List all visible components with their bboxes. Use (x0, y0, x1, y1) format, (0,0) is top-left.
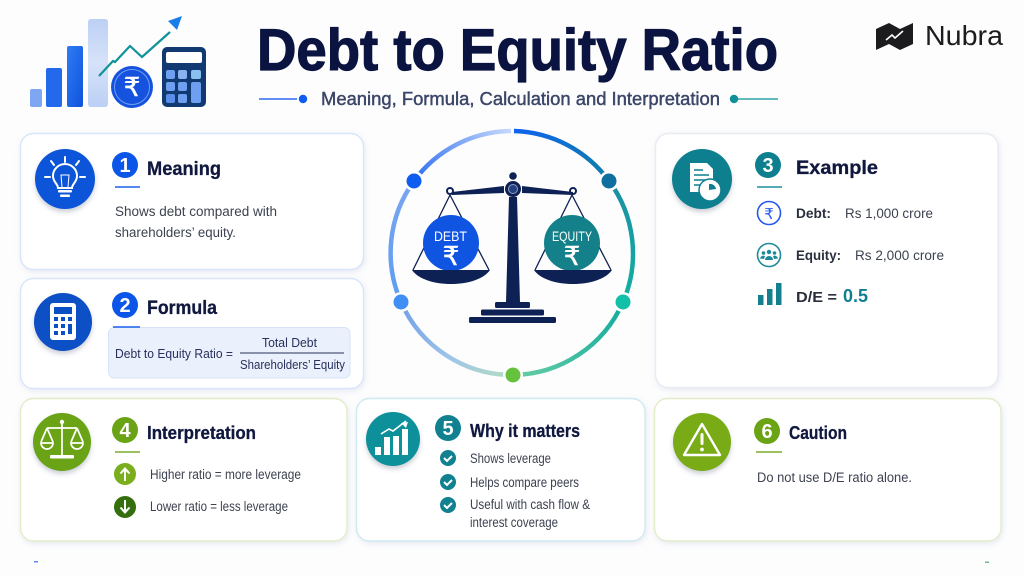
icon: document with pie (672, 149, 732, 209)
left pan: debt: ₹ (443, 241, 459, 271)
left pan: debt (412, 195, 490, 284)
number badge 6: 6 (761, 421, 773, 443)
number badge 6 (754, 418, 782, 452)
left pan: debt: DEBT (434, 229, 467, 244)
heading: formula: Formula (147, 297, 217, 319)
number badge 5 (435, 415, 461, 441)
icon: growth chart (366, 412, 420, 466)
number badge 2 (112, 292, 138, 318)
icon: calculator (162, 47, 206, 107)
formula box (108, 327, 350, 378)
heading: interpretation: Interpretation (147, 423, 256, 443)
panel: caution (654, 398, 1001, 541)
panel: meaning (20, 134, 364, 270)
heading: example: Example (796, 157, 878, 179)
number badge 3: 3 (762, 155, 774, 177)
number badge 1: 1 (119, 155, 131, 177)
row: higher ratio (114, 463, 301, 485)
icon: finance bars, rupee coin and calculator (30, 16, 206, 108)
list item: useful with cash flow: Useful with cash flow & (470, 497, 590, 512)
icon: balance scale (33, 413, 91, 471)
row: equity: Equity: (796, 248, 841, 263)
right pan: equity (534, 195, 612, 284)
heading: why it matters: Why it matters (470, 421, 580, 441)
icon: rising trend arrow (99, 16, 182, 76)
number badge 4: 4 (119, 420, 131, 442)
icon: warning triangle (673, 413, 731, 471)
text: meaning description: shareholders’ equity. (115, 225, 236, 240)
text: caution description: Do not use D/E ratio alone. (757, 470, 912, 485)
row: D/E result: D/E = (796, 290, 837, 306)
icon: light bulb (35, 149, 95, 209)
list item: shows leverage (440, 450, 551, 466)
ring nodes (391, 171, 633, 385)
panel: interpretation (20, 398, 347, 541)
heading: caution: Caution (789, 423, 847, 443)
list item: useful with cash flow (440, 497, 590, 530)
logo: Nubra (876, 20, 1003, 51)
row: lower ratio: Lower ratio = less leverage (150, 499, 288, 514)
row: debt: ₹ (764, 206, 774, 223)
formula box: Total Debt (262, 336, 318, 350)
row: debt: Rs 1,000 crore (845, 206, 933, 221)
row: D/E result (758, 283, 868, 306)
scale stand (447, 172, 576, 323)
row: D/E result: 0.5 (843, 285, 868, 306)
row: debt: Debt: (796, 206, 831, 221)
panel: example (656, 134, 998, 388)
balance scale (412, 172, 612, 323)
icon: rupee coin (111, 66, 153, 108)
list item: helps compare peers (440, 474, 579, 490)
formula box: Debt to Equity Ratio = (115, 347, 233, 361)
row: debt (758, 202, 933, 224)
panel: formula (20, 278, 364, 388)
right pan: equity: ₹ (564, 241, 580, 271)
number badge 4 (112, 417, 140, 452)
icon: rupee coin: ₹ (124, 72, 140, 102)
subtitle with connector dots: Meaning, Formula, Calculation and Interpretation (321, 88, 720, 109)
list item: useful with cash flow: interest coverage (470, 515, 558, 530)
right pan: equity: EQUITY (552, 229, 592, 244)
title: Debt to Equity Ratio (257, 18, 778, 83)
central ring (391, 131, 633, 385)
number badge 3 (755, 152, 782, 187)
row: higher ratio: Higher ratio = more leverage (150, 467, 301, 482)
panel: why it matters (356, 398, 645, 541)
icon: bar chart (30, 19, 108, 107)
number badge 2: 2 (119, 295, 131, 317)
text: meaning description (115, 204, 277, 240)
list item: shows leverage: Shows leverage (470, 451, 551, 466)
row: equity: Rs 2,000 crore (855, 248, 944, 263)
logo: Nubra: Nubra (925, 20, 1003, 51)
number badge 1 (112, 152, 140, 187)
heading: meaning: Meaning (147, 158, 221, 180)
list item: helps compare peers: Helps compare peers (470, 475, 579, 490)
text: meaning description: Shows debt compared with (115, 204, 277, 219)
icon: calculator (34, 293, 92, 351)
row: lower ratio (114, 496, 288, 518)
small footer marks (34, 561, 989, 563)
row: equity (758, 244, 944, 266)
formula box: Shareholders’ Equity (240, 358, 346, 372)
scale hub (505, 181, 521, 197)
icon: Nubra mark (876, 23, 913, 50)
number badge 5: 5 (442, 418, 454, 440)
